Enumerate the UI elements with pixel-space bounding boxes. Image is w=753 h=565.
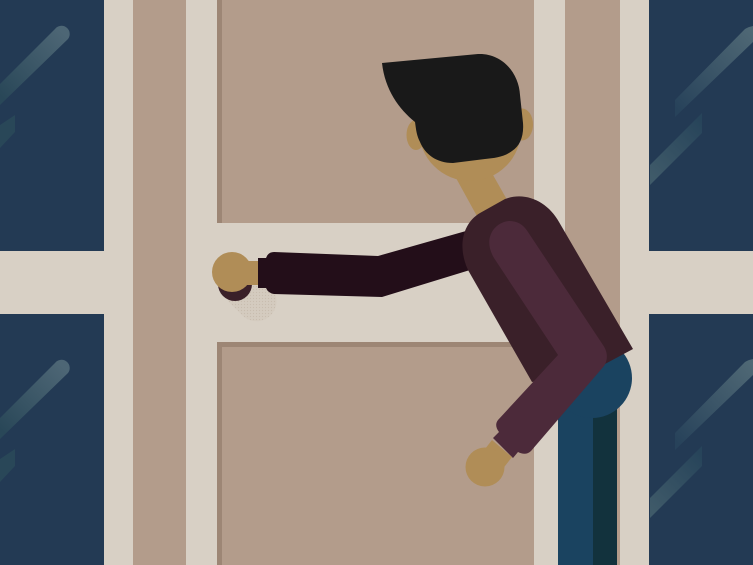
far hand bbox=[212, 252, 258, 292]
door frame strip: left bbox=[133, 0, 186, 565]
door handle shadow bbox=[228, 282, 276, 321]
ear: right bbox=[511, 108, 533, 140]
window: bottom left bbox=[0, 314, 104, 565]
ear: left bbox=[406, 120, 426, 150]
far arm sleeve bbox=[258, 231, 470, 297]
head bbox=[419, 79, 521, 181]
door panel: lower bbox=[217, 342, 534, 565]
door panel: upper bbox=[217, 0, 534, 223]
hair bbox=[382, 54, 523, 163]
near arm sleeve bbox=[489, 221, 607, 458]
window: bottom right bbox=[649, 314, 753, 565]
door frame strip: right bbox=[565, 0, 620, 565]
door handle bbox=[218, 267, 252, 301]
neck bbox=[456, 175, 510, 218]
leg: front bbox=[558, 400, 593, 565]
window: top left bbox=[0, 0, 104, 251]
torso bbox=[462, 196, 633, 382]
near hand bbox=[466, 440, 512, 486]
hip bbox=[552, 338, 632, 418]
window: top right bbox=[649, 0, 753, 251]
leg: back bbox=[593, 400, 617, 565]
